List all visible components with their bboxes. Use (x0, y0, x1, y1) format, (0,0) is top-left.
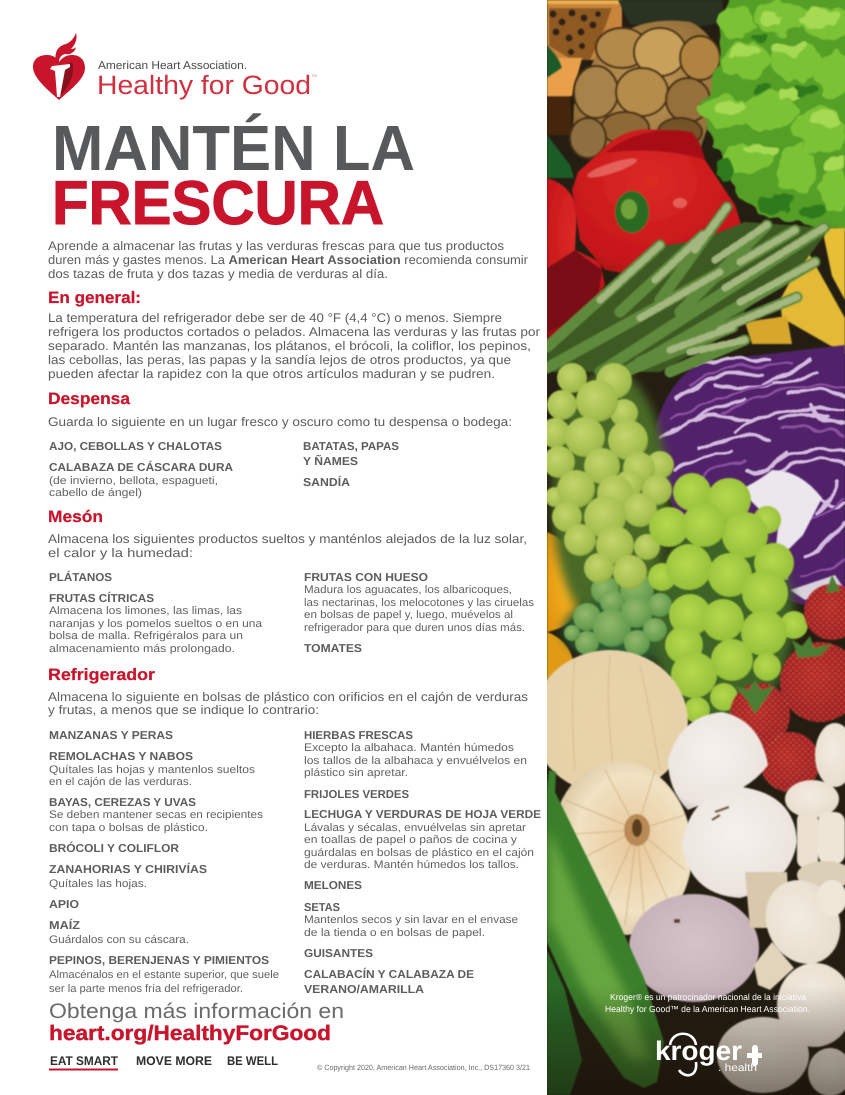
program name: Healthy for Good (97, 70, 311, 100)
bananas (745, 228, 845, 354)
onions (547, 649, 692, 936)
general advice text: separado. Mantén las manzanas, los plátanos, el brócoli, la coliflor, los pepinos, (48, 339, 531, 353)
sponsor note: Kroger® es un patrocinador nacional de la iniciativa (610, 992, 806, 1002)
icon: heart and torch (33, 33, 85, 100)
mesón right column: FRUTAS CON HUESO (304, 572, 428, 584)
mesón intro: el calor y la humedad: (48, 546, 193, 560)
heading: refrigerador: Refrigerador (48, 666, 156, 684)
mesón intro (48, 532, 527, 560)
pineapple (570, 0, 724, 160)
refrigerador right column: CALABACÍN Y CALABAZA DE (304, 967, 474, 981)
logo: American Heart Association Healthy for Good (33, 33, 317, 100)
refrigerador right column (304, 730, 541, 996)
refrigerador left column: BRÓCOLI Y COLIFLOR (49, 841, 180, 855)
garlic bulbs (629, 712, 797, 1002)
orange (547, 532, 583, 680)
organization name: American Heart Association. (98, 60, 247, 72)
tagline: eat smart, move more, be well (49, 1054, 278, 1070)
despensa left column: cabello de ángel) (49, 487, 142, 499)
refrigerador right column: los tallos de la albahaca y envuélvelos en (304, 755, 527, 767)
despensa left column (49, 441, 233, 499)
papaya (547, 0, 622, 178)
refrigerador right column: de verduras. Mantén húmedos los tallos. (304, 859, 519, 871)
refrigerador right column: GUISANTES (304, 948, 373, 960)
refrigerador right column: VERANO/AMARILLA (304, 984, 424, 996)
mesón left column: PLÁTANOS (49, 570, 112, 584)
refrigerador left column: con tapa o bolsas de plástico. (49, 822, 208, 834)
refrigerador right column: LECHUGA Y VERDURAS DE HOJA VERDE (304, 809, 541, 821)
logo: kroger health: kroger (655, 1036, 742, 1066)
refrigerador left column: Almacénalos en el estante superior, que suele (49, 969, 279, 981)
call to action (49, 1000, 344, 1045)
red cabbage (655, 345, 845, 612)
despensa right column: BATATAS, PAPAS (303, 441, 399, 453)
heading: despensa: Despensa (48, 390, 131, 408)
general advice text: refrigera los productos cortados o pelados. Almacena las verduras y las frutas por (48, 325, 540, 339)
tagline: eat smart, move more, be well: MOVE MORE (136, 1054, 212, 1068)
intro paragraph: duren más y gastes menos. La American Heart Association recomienda consumir (48, 253, 528, 267)
refrigerador left column: Quítales las hojas. (49, 878, 147, 890)
refrigerador left column: MAÍZ (49, 918, 80, 932)
refrigerador right column: Excepto la albahaca. Mantén húmedos (304, 742, 515, 754)
general advice text (48, 311, 540, 381)
tagline: eat smart, move more, be well: BE WELL (227, 1054, 278, 1068)
mesón left column (49, 570, 263, 655)
refrigerador left column: ZANAHORIAS Y CHIRIVÍAS (49, 862, 207, 876)
refrigerador right column: Lávalas y sécalas, envuélvelas sin apretar (304, 822, 526, 834)
call to action: Obtenga más información en (49, 1000, 344, 1023)
refrigerador right column: Mantenlos secos y sin lavar en el envase (304, 914, 518, 926)
despensa left column: AJO, CEBOLLAS Y CHALOTAS (49, 441, 222, 453)
despensa intro: Guarda lo siguiente en un lugar fresco y oscuro como tu despensa o bodega: (48, 415, 512, 429)
logo: kroger health: . health (718, 1062, 757, 1074)
refrigerador left column: Se deben mantener secas en recipientes (49, 809, 264, 821)
mesón intro: Almacena los siguientes productos sueltos y manténlos alejados de la luz solar, (48, 532, 527, 546)
refrigerador right column: FRIJOLES VERDES (304, 789, 409, 801)
asparagus (547, 207, 830, 372)
refrigerador left column: en el cajón de las verduras. (49, 776, 192, 788)
panel: mesón (48, 508, 535, 655)
panel: en general (48, 289, 540, 381)
refrigerador left column: BAYAS, CEREZAS Y UVAS (49, 797, 196, 809)
refrigerador intro (48, 690, 528, 717)
refrigerador right column: plástico sin apretar. (304, 767, 408, 779)
mesón left column: Almacena los limones, las limas, las (49, 605, 243, 617)
left red pepper (547, 178, 605, 340)
refrigerador right column: SETAS (304, 902, 340, 914)
panel: despensa (48, 390, 512, 499)
icon: plus (747, 1045, 762, 1066)
mesón left column: FRUTAS CÍTRICAS (49, 591, 154, 605)
refrigerador right column: MELONES (304, 880, 362, 892)
intro paragraph: dos tazas de fruta y dos tazas y media de verduras al día. (48, 267, 388, 281)
general advice text: pueden afectar la rapidez con la que otros artículos maduran y se pudren. (48, 367, 495, 381)
mesón left column: almacenamiento más prolongado. (49, 643, 235, 655)
refrigerador right column: HIERBAS FRESCAS (304, 730, 413, 742)
refrigerador left column: ser la parte menos fría del refrigerador. (49, 983, 243, 995)
photo panel: fresh fruits and vegetables (532, 0, 845, 1095)
despensa left column: CALABAZA DE CÁSCARA DURA (49, 460, 233, 474)
title: FRESCURA (52, 169, 384, 238)
refrigerador right column: en toallas de papel o paños de cocina y (304, 834, 518, 846)
sponsor note (605, 992, 810, 1014)
refrigerador intro: Almacena lo siguiente en bolsas de plástico con orificios en el cajón de verduras (48, 690, 528, 704)
refrigerador left column: Quítales las hojas y mantenlos sueltos (49, 764, 256, 776)
sponsor note: Healthy for Good™ de la American Heart Association. (605, 1004, 810, 1014)
mesón right column: en bolsas de papel y, luego, muévelos al (304, 609, 513, 621)
heading: mesón: Mesón (48, 508, 103, 526)
mesón left column: bolsa de malla. Refrigéralos para un (49, 630, 243, 642)
copyright: © Copyright 2020, American Heart Association, Inc., DS17360 3/21 (317, 1063, 530, 1072)
lettuce (701, 0, 845, 232)
mesón right column: las nectarinas, los melocotones y las ciruelas (304, 597, 535, 609)
title (52, 112, 415, 238)
strawberries (730, 575, 845, 792)
red bell pepper (572, 129, 746, 278)
despensa left column: (de invierno, bellota, espagueti, (49, 475, 218, 487)
mesón left column: naranjas y los pomelos sueltos o en una (49, 618, 263, 630)
general advice text: La temperatura del refrigerador debe ser de 40 °F (4,4 °C) o menos. Siempre (48, 311, 502, 325)
refrigerador left column: Guárdalos con su cáscara. (49, 934, 189, 946)
mesón right column: Madura los aguacates, los albaricoques, (304, 584, 512, 596)
panel: refrigerador (48, 666, 541, 996)
refrigerador left column: MANZANAS Y PERAS (49, 730, 173, 742)
mushrooms (717, 723, 845, 1095)
mesón right column: refrigerador para que duren unos días más. (304, 622, 525, 634)
refrigerador right column: guárdalas en bolsas de plástico en el cajón (304, 847, 534, 859)
zucchini (547, 770, 664, 1095)
grapes (540, 363, 808, 723)
intro paragraph: Aprende a almacenar las frutas y las verduras frescas para que tus productos (48, 239, 504, 253)
refrigerador left column: PEPINOS, BERENJENAS Y PIMIENTOS (49, 955, 269, 967)
call to action: heart.org/HealthyForGood (49, 1022, 331, 1045)
refrigerador intro: y frutas, a menos que se indique lo contrario: (48, 703, 319, 717)
refrigerador left column: REMOLACHAS Y NABOS (49, 751, 193, 763)
heading: en general: En general: (48, 289, 141, 307)
intro paragraph (48, 239, 528, 281)
despensa right column (303, 441, 399, 489)
title: MANTÉN LA (52, 112, 415, 184)
tagline: eat smart, move more, be well: EAT SMART (50, 1054, 118, 1068)
despensa right column: Y ÑAMES (303, 454, 358, 468)
refrigerador left column (49, 730, 279, 995)
logo: kroger health (655, 1034, 762, 1075)
refrigerador right column: de la tienda o en bolsas de papel. (304, 927, 485, 939)
mesón right column: TOMATES (304, 643, 362, 655)
trademark mark: TM (311, 73, 317, 78)
refrigerador left column: APIO (49, 899, 79, 911)
mesón right column (304, 572, 535, 655)
general advice text: las cebollas, las peras, las papas y la sandía lejos de otros productos, ya que (48, 353, 511, 367)
despensa right column: SANDÍA (303, 475, 350, 489)
